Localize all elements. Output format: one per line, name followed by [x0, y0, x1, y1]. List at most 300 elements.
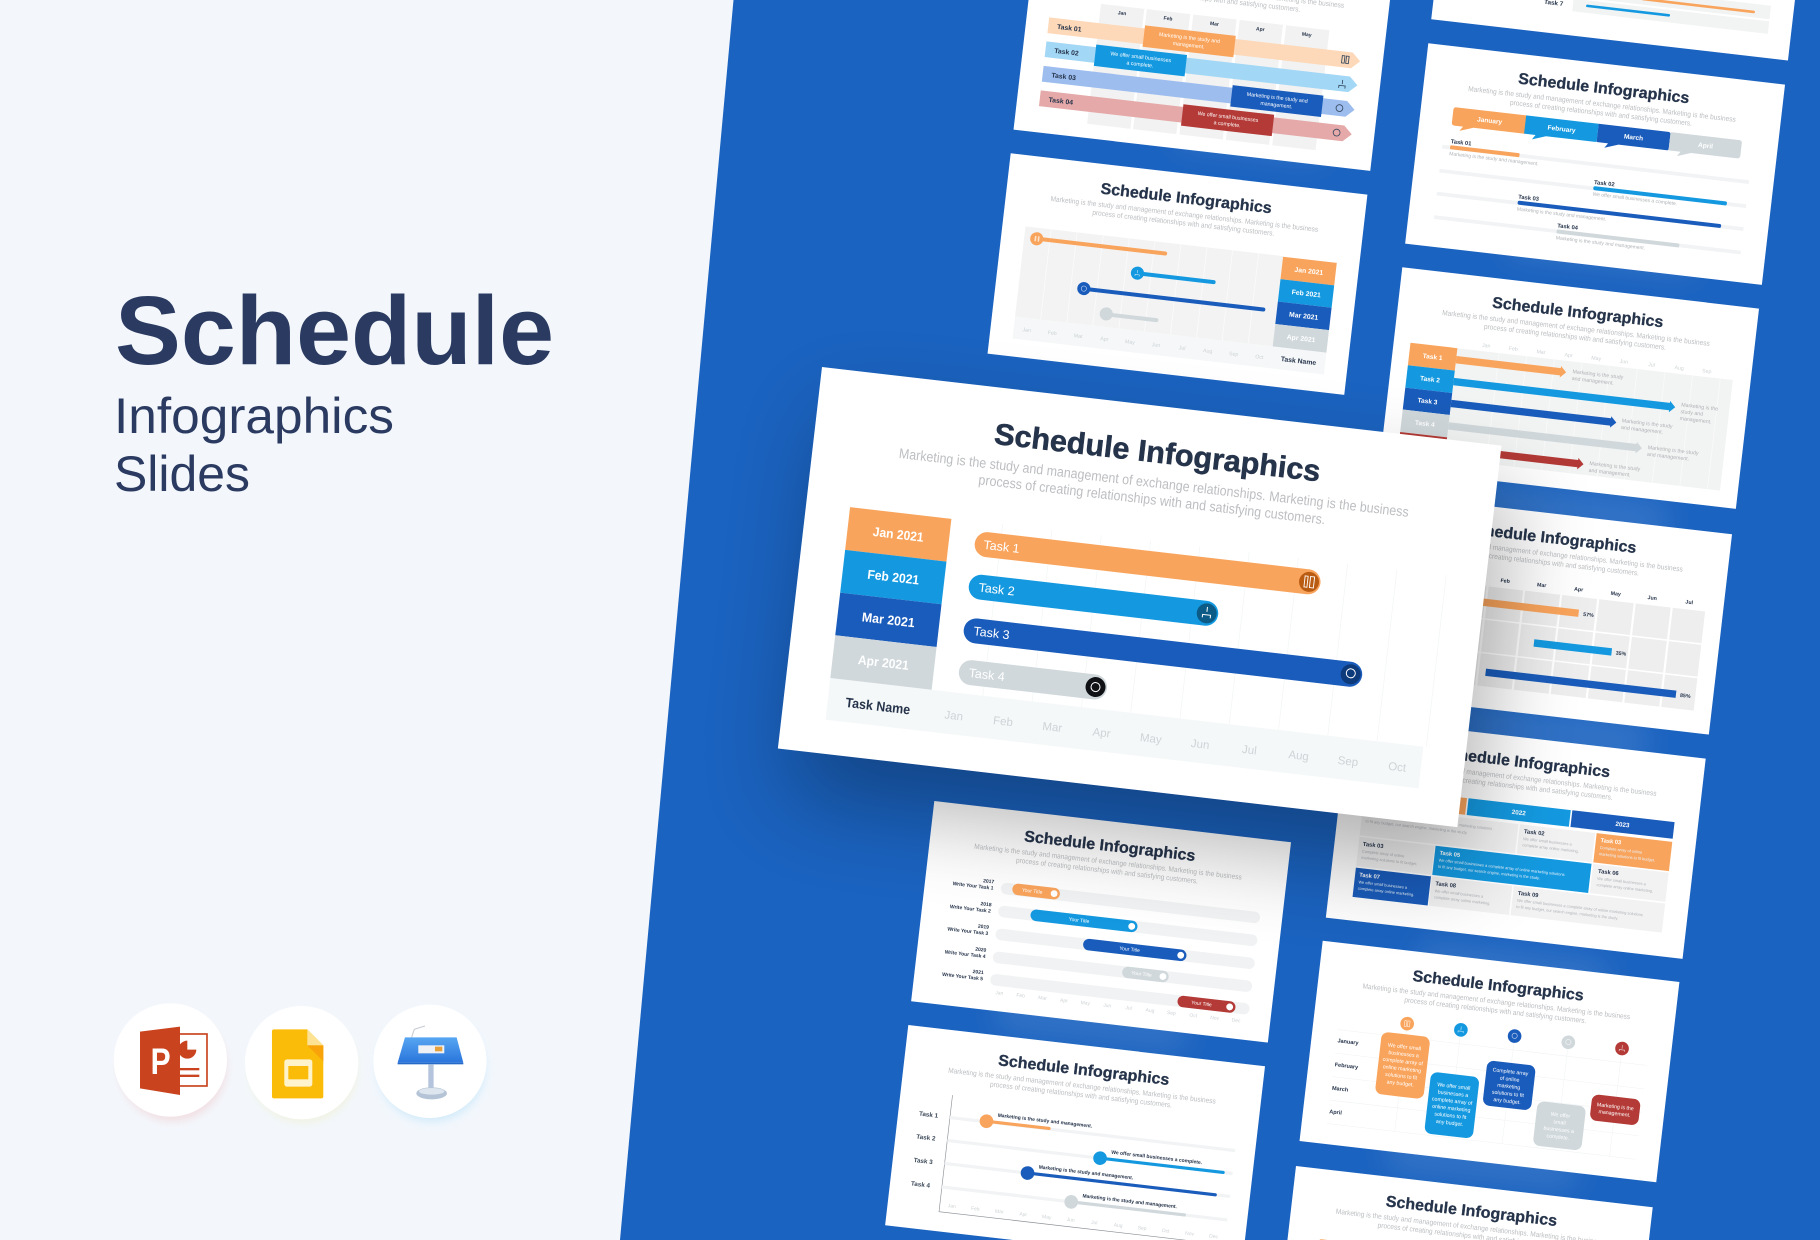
- arrow notes: [1561, 369, 1721, 488]
- grey chart panel: [1445, 348, 1733, 491]
- slide subtitle: process of creating relationships with and satisfying customers.: [1404, 995, 1587, 1025]
- month cells: Mar 2021: [861, 609, 916, 630]
- month labels: Aug: [1674, 365, 1684, 372]
- task bar 2: [967, 573, 1220, 627]
- task cells: [1398, 343, 1457, 459]
- heading: Schedule: Schedule: [115, 276, 554, 385]
- task name label: Task Name: [1280, 356, 1317, 367]
- slide subtitle: process of creating relationships with and satisfying customers.: [989, 1080, 1173, 1110]
- task notes: We offer small businesses a complete array of online marketing solutions: [1517, 898, 1643, 917]
- slide title: Schedule Infographics: [1023, 828, 1197, 865]
- blue background panel: [620, 0, 1820, 1240]
- month callouts: April: [1698, 142, 1713, 151]
- task labels: Task 04: [1048, 97, 1074, 107]
- month labels: Oct: [1255, 354, 1264, 361]
- month labels: Jun: [1190, 738, 1210, 752]
- month labels: Oct: [1189, 1013, 1198, 1019]
- callouts: Marketing is the study and: [1159, 32, 1220, 45]
- month labels: Oct: [1388, 761, 1408, 775]
- task labels: Task 02: [1054, 48, 1079, 58]
- pills: Your Title: [1131, 970, 1152, 979]
- month cells: Jan 2021: [872, 524, 924, 545]
- slide: year task table: [1326, 717, 1706, 959]
- slide: rounded cards: [1300, 941, 1679, 1182]
- slide title: Schedule Infographics: [1412, 968, 1585, 1005]
- highlighted task notes: [1357, 818, 1656, 924]
- card text: solutions to fit: [1385, 1072, 1418, 1082]
- month labels: Jun: [1647, 595, 1657, 602]
- month labels: Jul: [1125, 1005, 1132, 1012]
- grid cells: [1438, 582, 1705, 711]
- task labels and notes: Task 01: [1450, 139, 1472, 148]
- timeline bars: [1022, 231, 1271, 339]
- month labels: Sep: [1137, 1225, 1147, 1232]
- task notes: to fit any budget, our search engine, marketing is the study.: [1516, 904, 1619, 921]
- month labels: Feb: [971, 1206, 980, 1213]
- row tracks: [942, 1116, 1235, 1221]
- month labels: Jul: [1091, 1220, 1098, 1226]
- slide: yearly pill timeline: [911, 801, 1291, 1043]
- task cells: Task 2: [1420, 375, 1441, 385]
- task notes: marketing solutions to fit budget.: [1361, 855, 1418, 866]
- month labels: Sep: [1167, 1010, 1176, 1017]
- row labels: Write Your Task 4: [944, 949, 986, 960]
- slide subtitle: Marketing is the study and management of exchange relationships. Marketing is the business: [948, 1066, 1217, 1106]
- month labels: Sep: [1337, 755, 1359, 769]
- arrow notes: and management.: [1571, 376, 1614, 387]
- month cells: [1273, 257, 1337, 353]
- task bar 3: [962, 617, 1364, 688]
- highlighted task notes: to fit any budget, our search engine, marketing is the study.: [1438, 864, 1540, 880]
- slide: task arrows: [1379, 267, 1759, 509]
- card text: small: [1553, 1119, 1566, 1127]
- row labels: Write Your Task 1: [952, 881, 994, 892]
- row tracks: [1434, 145, 1749, 254]
- arrow notes: Marketing is the: [1681, 402, 1718, 413]
- arrow notes: Marketing is the study: [1621, 418, 1673, 430]
- task cells: Task 5: [1412, 442, 1433, 451]
- task notes: complete array online marketing.: [1434, 894, 1491, 906]
- card text: complete array of: [1382, 1057, 1424, 1067]
- task notes: complete array online marketing.: [1596, 882, 1653, 894]
- slide subtitle: process of creating relationships with and satisfying customers.: [1509, 98, 1693, 128]
- month labels: May: [1125, 339, 1136, 346]
- main slide shadow: [788, 413, 1511, 873]
- month labels: May: [1591, 355, 1602, 363]
- task labels and notes: Marketing is the study and management.: [1449, 151, 1539, 167]
- slide subtitle: Marketing is the study and management of exchange relationships. Marketing is the business: [1415, 534, 1684, 574]
- subheading: Infographics Slides: [114, 388, 394, 502]
- card text: marketing: [1497, 1083, 1521, 1091]
- task labels and notes: We offer small businesses a complete.: [1592, 192, 1677, 207]
- arrow notes: study and: [1680, 409, 1703, 418]
- arrow notes: management.: [1679, 416, 1712, 426]
- grid separators: [1475, 585, 1673, 708]
- slide title: Schedule Infographics: [1491, 295, 1665, 331]
- task bar 4: [958, 659, 1108, 701]
- task bar 1: [973, 531, 1322, 596]
- card text: any budget.: [1386, 1079, 1414, 1089]
- row labels: [942, 875, 995, 982]
- month cells: Mar 2021: [1289, 312, 1319, 322]
- percent labels: 85%: [1680, 693, 1691, 700]
- card text: any budget.: [1493, 1097, 1521, 1106]
- task headings: Task 02: [1524, 829, 1545, 838]
- bottom month strip: [825, 678, 1423, 788]
- month labels: Mar: [1073, 333, 1083, 340]
- month labels: Feb: [1500, 578, 1510, 585]
- arrow notes: and management.: [1588, 468, 1631, 479]
- pills: Your Title: [1068, 917, 1090, 925]
- month callouts: January: [1477, 116, 1503, 126]
- month labels: Feb: [1163, 16, 1173, 23]
- month labels: May: [1042, 1214, 1052, 1221]
- row labels: 2019: [978, 924, 989, 931]
- task labels and notes: [1441, 139, 1681, 255]
- task name label: Task Name: [845, 695, 911, 717]
- task cells: Task 3: [1417, 397, 1438, 407]
- subheading: Infographics Slides: Infographics: [114, 388, 394, 444]
- month labels: Nov: [1210, 1015, 1220, 1022]
- month labels: Feb: [992, 715, 1014, 729]
- task headings: Task 08: [1435, 881, 1457, 890]
- task bar 2: Task 2: [978, 581, 1015, 599]
- task arrow bands: [1039, 17, 1361, 142]
- icon: PowerPoint: P: [151, 1040, 171, 1082]
- callouts: management.: [1172, 41, 1205, 51]
- card text: businesses a: [1437, 1090, 1469, 1099]
- month labels: Mar: [995, 1209, 1004, 1216]
- main slide title: Schedule Infographics: [993, 418, 1322, 488]
- month labels: April: [1329, 1109, 1343, 1117]
- task cells: Task 4: [1415, 420, 1435, 429]
- month cells: Feb 2021: [867, 567, 920, 588]
- task labels and notes: Marketing is the study and management.: [1555, 235, 1645, 252]
- slide: milestone rows with axis: [885, 1025, 1265, 1240]
- month cells: Apr 2021: [1286, 334, 1316, 344]
- task labels: [1048, 24, 1082, 107]
- pills: [1001, 883, 1247, 1013]
- month labels: Apr: [1564, 352, 1573, 359]
- month labels: Mar: [1042, 721, 1063, 735]
- task notes: We offer small businesses a: [1597, 876, 1647, 886]
- month labels: Jan: [1117, 10, 1127, 17]
- slide subtitle: process of creating relationships with and satisfying customers.: [1456, 548, 1640, 578]
- month labels: Apr: [1256, 26, 1265, 33]
- task labels: [911, 1111, 939, 1190]
- slide subtitle: Marketing is the study and management of exchange relationships. Marketing is the business: [1050, 194, 1319, 234]
- slide title: Schedule Infographics: [1464, 520, 1638, 557]
- year headers: 2021: [1408, 797, 1423, 805]
- card text: businesses a: [1388, 1050, 1419, 1060]
- month labels: May: [1610, 591, 1621, 598]
- task headings: [1359, 811, 1623, 908]
- task cells: Task 1: [1422, 353, 1443, 362]
- grid: [1327, 1023, 1647, 1159]
- month labels: Nov: [1185, 1231, 1195, 1238]
- month labels: May: [1139, 732, 1163, 746]
- highlighted task notes: marketing solutions to fit budget.: [1599, 851, 1655, 863]
- arrow notes: and management.: [1647, 452, 1689, 463]
- orange tab: [1317, 1239, 1391, 1240]
- month labels: Feb: [1016, 993, 1025, 1000]
- month callouts: February: [1547, 125, 1576, 135]
- month labels: [1022, 327, 1264, 361]
- month labels: Aug: [1145, 1007, 1155, 1014]
- card text: of online: [1499, 1076, 1520, 1084]
- card text: We offer: [1550, 1112, 1571, 1120]
- month labels: Sep: [1229, 351, 1239, 358]
- task labels and notes: Marketing is the study and management.: [1517, 207, 1606, 223]
- icon: Keynote: [373, 1005, 487, 1121]
- month labels: Feb: [1047, 330, 1057, 337]
- month labels: Jan: [1482, 343, 1491, 350]
- slide subtitle: process of creating relationships with and satisfying customers.: [1430, 772, 1613, 802]
- row labels: Write Your Task 2: [950, 904, 991, 915]
- row labels: 2020: [975, 947, 987, 954]
- slide subtitle: process of creating relationships with and satisfying customers.: [1483, 322, 1667, 352]
- row labels: Write Your Task 5: [942, 972, 983, 982]
- card text: solutions to fit: [1434, 1111, 1467, 1121]
- card text: Complete array: [1492, 1067, 1529, 1077]
- task notes: We offer small businesses a: [1434, 888, 1484, 899]
- slide: partially visible at bottom: [1273, 1166, 1653, 1240]
- callouts: We offer small businesses: [1110, 51, 1172, 64]
- subheading: Infographics Slides: Slides: [114, 446, 250, 502]
- task labels: Task 2: [916, 1134, 936, 1143]
- slide subtitle: Marketing is the study and management of exchange relationships. Marketing is the business: [1362, 981, 1631, 1021]
- row labels: Write Your Task 3: [947, 926, 989, 937]
- milestone notes: [989, 1113, 1206, 1213]
- task labels: Task 03: [1051, 72, 1076, 82]
- slide title: Schedule Infographics: [1438, 745, 1611, 781]
- month labels: January: [1337, 1038, 1360, 1047]
- slide subtitle: Marketing is the study and management of exchange relationships. Marketing is the business: [1442, 308, 1711, 348]
- milestone notes: Marketing is the study and management.: [1038, 1165, 1134, 1181]
- month labels: May: [1302, 32, 1312, 39]
- callouts: [1088, 20, 1329, 142]
- year headers: 2022: [1511, 809, 1527, 817]
- month labels: Aug: [1113, 1222, 1123, 1229]
- task notes: Complete array of online: [1362, 849, 1405, 858]
- slide subtitle: Marketing is the study and management of exchange relationships. Marketing is the business: [1468, 84, 1737, 124]
- month labels: Mar: [1536, 349, 1546, 356]
- row tracks: [990, 882, 1261, 1015]
- pills: Your Title: [1191, 1000, 1212, 1008]
- month labels: Apr: [1019, 1211, 1028, 1218]
- task headings: Task 03: [1362, 842, 1384, 850]
- card text: complete array of: [1432, 1096, 1473, 1107]
- main slide subtitle: process of creating relationships with and satisfying customers.: [978, 471, 1326, 527]
- arrow notes: and management.: [1621, 425, 1663, 436]
- slide: callout months with task rows: [1405, 43, 1785, 285]
- month labels: [944, 709, 1408, 775]
- month labels: Jul: [1241, 744, 1257, 757]
- month labels: Aug: [1203, 348, 1213, 355]
- highlighted task notes: We offer small businesses a: [1358, 879, 1408, 890]
- callouts: We offer small businesses: [1197, 111, 1259, 124]
- cards: [1371, 1032, 1645, 1157]
- month labels: Jan: [947, 1203, 956, 1210]
- task labels: Task 3: [913, 1157, 934, 1166]
- percent labels: [1575, 612, 1699, 700]
- main slide: Gantt chart: [778, 367, 1501, 827]
- year headers: 2023: [1615, 821, 1630, 829]
- slide title: Schedule Infographics: [1100, 181, 1273, 217]
- row labels: 2021: [972, 969, 984, 976]
- month labels: Jan: [995, 990, 1004, 997]
- task labels and notes: Task 03: [1518, 195, 1539, 203]
- task labels: Task 01: [1057, 24, 1082, 34]
- card text: online marketing: [1382, 1064, 1421, 1075]
- card text: businesses a: [1543, 1126, 1574, 1135]
- month cells: [830, 507, 951, 690]
- arrow notes: Marketing is the study: [1589, 461, 1641, 473]
- row labels: 2017: [983, 878, 995, 885]
- month cells: Feb 2021: [1291, 289, 1321, 299]
- card text: any budget.: [1436, 1119, 1464, 1128]
- percent labels: 57%: [1583, 612, 1594, 619]
- month callouts: [1451, 107, 1742, 163]
- arrows: [1445, 354, 1678, 480]
- month labels: Sep: [1702, 368, 1712, 375]
- callouts: Marketing is the study and: [1246, 92, 1308, 105]
- milestone notes: Marketing is the study and management.: [1082, 1193, 1178, 1210]
- month labels: Feb: [1508, 346, 1518, 353]
- bars: [1586, 0, 1755, 26]
- highlighted task headings: [1359, 811, 1621, 908]
- month labels: Apr: [1100, 336, 1109, 343]
- card text: complete.: [1546, 1133, 1569, 1142]
- highlighted task headings: Task 05: [1439, 851, 1461, 859]
- task bar 1: Task 1: [983, 538, 1020, 556]
- main slide subtitle: Marketing is the study and management of exchange relationships. Marketing is the business: [898, 445, 1410, 520]
- month labels: [1117, 10, 1312, 39]
- callouts: management.: [1260, 101, 1293, 110]
- coloured task cells: [1353, 806, 1672, 933]
- circles: [1400, 1016, 1630, 1056]
- month labels: Jun: [1066, 1217, 1075, 1224]
- callouts: a complete.: [1213, 120, 1241, 129]
- month labels: Jun: [1103, 1003, 1112, 1009]
- slide: arrow task schedule: [1014, 0, 1393, 171]
- slide title: Schedule Infographics: [1385, 1193, 1558, 1230]
- task headings: Task 06: [1598, 869, 1619, 877]
- month labels: Oct: [1161, 1228, 1170, 1235]
- month labels: Apr: [1092, 727, 1111, 741]
- row labels: 2018: [980, 901, 992, 908]
- slide: percent progress grid: [1352, 493, 1732, 735]
- pills: Your Title: [1119, 946, 1140, 954]
- month labels: Jun: [1619, 359, 1628, 366]
- task labels: Task 4: [911, 1180, 931, 1190]
- slide: partial chart at top right: [1431, 0, 1811, 61]
- month labels: Jul: [1648, 362, 1655, 369]
- month labels: Jan: [944, 709, 964, 723]
- card text: We offer small: [1388, 1043, 1421, 1052]
- month callouts: March: [1624, 133, 1643, 143]
- pills: Your Title: [1022, 887, 1043, 896]
- month cells: Jan 2021: [1294, 267, 1324, 277]
- grey chart panel: [1015, 226, 1283, 346]
- slide title: Schedule Infographics: [1517, 71, 1691, 107]
- percent labels: 35%: [1615, 651, 1627, 658]
- milestone bars: [971, 1114, 1228, 1226]
- slide subtitle: Marketing is the study and management of exchange relationships. Marketing is the business: [974, 842, 1243, 882]
- slide subtitle: process of creating relationships with and satisfying customers.: [1092, 208, 1275, 238]
- slide subtitle: process of creating relationships with and satisfying customers.: [1015, 856, 1199, 886]
- task labels and notes: Task 04: [1557, 223, 1579, 232]
- slide subtitle: [1075, 0, 1345, 19]
- axes: [939, 1095, 1235, 1240]
- month labels: Apr: [1060, 998, 1068, 1004]
- task labels and notes: Task 02: [1594, 180, 1615, 188]
- month labels: Mar: [1038, 995, 1047, 1002]
- task notes: complete array online marketing.: [1522, 842, 1579, 854]
- arrow notes: Marketing is the study: [1647, 445, 1699, 457]
- task notes: We offer small businesses a complete array of online marketing solutions: [1366, 812, 1493, 831]
- band icons: [1333, 56, 1349, 136]
- progress bars: [1450, 596, 1684, 698]
- card text: online marketing: [1432, 1104, 1471, 1114]
- month labels: [1500, 578, 1694, 606]
- month labels: March: [1332, 1086, 1349, 1094]
- icon: Google Slides: [245, 1006, 358, 1123]
- bottom strip: [1013, 317, 1326, 375]
- highlighted task notes: We offer small businesses a complete array of online marketing solutions: [1438, 857, 1565, 877]
- highlighted task headings: Task 03: [1600, 838, 1621, 846]
- slide: month timeline with cells at right: [988, 153, 1367, 395]
- month labels: Dec: [1231, 1017, 1241, 1024]
- month labels: Mar: [1537, 582, 1547, 589]
- task bar 4: Task 4: [968, 666, 1006, 684]
- month labels: [947, 1203, 1219, 1240]
- task notes: We offer small businesses a: [1523, 836, 1573, 847]
- month labels: Jan: [1022, 327, 1031, 334]
- month columns: [1087, 4, 1329, 150]
- card text: management.: [1598, 1109, 1631, 1119]
- month labels: [1482, 343, 1712, 375]
- month labels: February: [1334, 1062, 1359, 1071]
- month labels: May: [1080, 1000, 1091, 1007]
- month labels: [1329, 1038, 1362, 1118]
- month cells: Apr 2021: [857, 652, 910, 673]
- grey task cells: [1353, 806, 1672, 933]
- card text: We offer small: [1437, 1082, 1471, 1092]
- month labels: Jul: [1685, 599, 1694, 606]
- month labels: [995, 990, 1241, 1024]
- month labels: Aug: [1288, 749, 1309, 763]
- row backgrounds: [1572, 0, 1771, 34]
- month labels: Mar: [1210, 21, 1219, 28]
- highlighted task headings: Task 07: [1359, 873, 1380, 881]
- task notes: to fit any budget, our search engine, marketing is the study.: [1365, 818, 1468, 835]
- callouts: a complete.: [1126, 60, 1154, 70]
- card text: [1376, 1042, 1638, 1149]
- milestone notes: We offer small businesses a complete.: [1111, 1150, 1203, 1166]
- milestone notes: Marketing is the study and management.: [997, 1113, 1093, 1130]
- year headers: [1363, 786, 1675, 839]
- highlighted task notes: Complete array of online: [1600, 845, 1643, 855]
- task bar 3: Task 3: [973, 624, 1010, 642]
- task bars: [1442, 145, 1730, 252]
- task headings: Task 09: [1517, 891, 1539, 899]
- highlighted task notes: complete array online marketing.: [1357, 886, 1415, 897]
- slide title: Schedule Infographics: [997, 1052, 1171, 1089]
- month labels: Jul: [1178, 345, 1186, 352]
- icon: PowerPoint: [114, 1003, 227, 1121]
- card text: Marketing is the: [1596, 1102, 1634, 1112]
